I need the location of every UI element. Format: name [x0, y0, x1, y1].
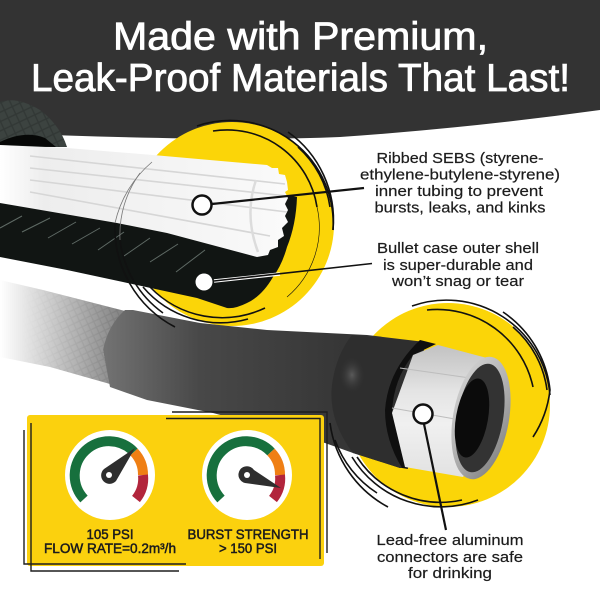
label: burst strength: BURST STRENGTH: [188, 527, 308, 542]
callout: aluminum connectors: [376, 532, 524, 582]
label: flow rate: FLOW RATE=0.2m³/h: [44, 541, 176, 556]
title: Made with Premium,: [113, 16, 488, 58]
header banner: [0, 0, 600, 139]
yellow circle: tubing detail: [130, 122, 334, 326]
black protective sleeve: [103, 310, 425, 468]
callout: aluminum connectors: Lead-free aluminum: [376, 532, 524, 549]
leader: outer shell: [196, 264, 372, 290]
braided outer shell: [0, 195, 297, 308]
callout: inner tubing: ethylene-butylene-styrene): [360, 166, 560, 184]
callout: aluminum connectors: for drinking: [408, 565, 492, 582]
callout: outer shell: is super-durable and: [383, 257, 533, 274]
label: burst strength: > 150 PSI: [219, 541, 277, 556]
coiled hose in background: [0, 100, 67, 147]
label: flow rate: [44, 527, 176, 556]
sleeve collar: [331, 335, 436, 469]
ribbed white inner tubing: [0, 145, 288, 257]
callout: inner tubing: [360, 150, 560, 216]
aluminum connector: [392, 345, 519, 484]
leader: aluminum connector: [414, 404, 446, 530]
decorative arcs: [115, 121, 550, 507]
yellow circle: connector detail: [346, 303, 550, 507]
title: [31, 16, 570, 100]
faded braided hose: [0, 280, 125, 384]
callout: outer shell: Bullet case outer shell: [377, 240, 539, 257]
gauge: burst strength: [202, 430, 292, 520]
label: flow rate: 105 PSI: [86, 527, 134, 542]
callout: outer shell: [377, 240, 539, 290]
callout: inner tubing: Ribbed SEBS (styrene-: [376, 150, 544, 167]
title: Leak-Proof Materials That Last!: [31, 57, 570, 100]
callout: inner tubing: inner tubing to prevent: [375, 183, 544, 200]
callout: inner tubing: bursts, leaks, and kinks: [374, 200, 546, 216]
callout: aluminum connectors: connectors are safe: [377, 549, 523, 566]
label: burst strength: [188, 527, 308, 556]
panel: pressure ratings: [24, 412, 327, 571]
callout: outer shell: won’t snag or tear: [391, 273, 524, 290]
gauge: 105 PSI: [65, 430, 155, 520]
leader: inner tubing: [192, 188, 364, 214]
